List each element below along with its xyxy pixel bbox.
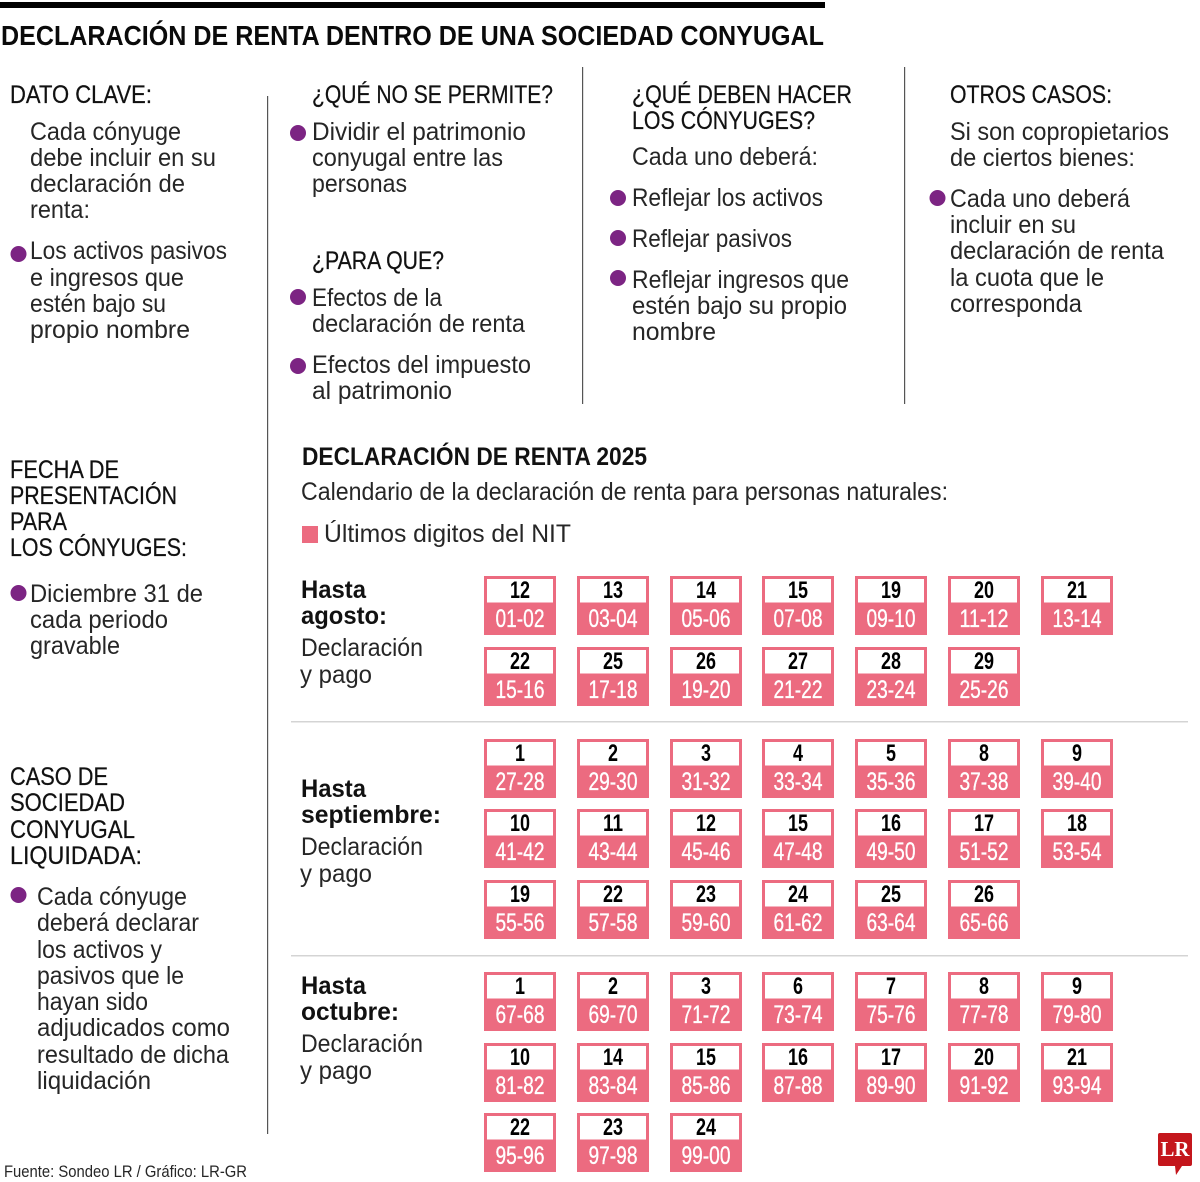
bullet: cada cónyuge deberá declarar: hayan sido xyxy=(37,988,148,1016)
bullet: reflejar ingresos: nombre xyxy=(632,318,716,346)
cell 13 / 03-04: 03-04 xyxy=(588,605,638,633)
cell 21 / 13-14: 21 xyxy=(1067,577,1087,604)
cell 12 / 01-02: 12 xyxy=(510,577,530,604)
title: DECLARACIÓN DE RENTA DENTRO DE UNA SOCIEDAD CONYUGAL xyxy=(1,20,824,51)
cell 9 / 79-80: 79-80 xyxy=(1052,1001,1102,1029)
bullet: efectos declaración: Efectos de la xyxy=(312,284,442,312)
heading: qué deben hacer xyxy=(632,80,852,135)
icon: LR logo: LR xyxy=(1160,1137,1190,1161)
label: hasta septiembre: septiembre: xyxy=(301,801,441,829)
cell 14 / 05-06: 05-06 xyxy=(682,605,730,633)
cell 19 / 09-10 xyxy=(855,576,927,635)
bullet: activos pasivos: Los activos pasivos xyxy=(30,237,227,265)
cell 8 / 77-78: 8 xyxy=(979,973,989,1000)
cell 26 / 19-20 xyxy=(670,647,742,706)
cell 16 / 49-50: 49-50 xyxy=(866,838,916,866)
bullet: dividir patrimonio xyxy=(290,118,526,198)
cell 20 / 11-12: 20 xyxy=(974,577,994,604)
bullet: cuota: corresponda xyxy=(950,290,1082,318)
cell 26 / 65-66: 65-66 xyxy=(960,909,1008,937)
cell 20 / 91-92: 20 xyxy=(974,1044,994,1071)
cell 21 / 93-94: 93-94 xyxy=(1052,1072,1102,1100)
bullet: reflejar ingresos xyxy=(610,266,849,346)
cell 2 / 69-70: 69-70 xyxy=(588,1001,638,1029)
bullet: cada cónyuge deberá declarar: deberá declarar xyxy=(37,909,199,937)
cell 15 / 07-08 xyxy=(762,576,834,635)
panel: fecha de presentación xyxy=(10,456,203,660)
cell 19 / 55-56: 55-56 xyxy=(496,909,544,937)
cell 9 / 79-80: 9 xyxy=(1072,973,1082,1000)
heading: qué deben hacer: ¿QUÉ DEBEN HACER xyxy=(632,80,852,109)
cell 26 / 19-20: 19-20 xyxy=(682,676,730,704)
text: cada uno deberá: Cada uno deberá: xyxy=(632,143,818,171)
cell 8 / 77-78: 77-78 xyxy=(960,1001,1008,1029)
cell 12 / 01-02 xyxy=(484,576,556,635)
heading: fecha de presentación: LOS CÓNYUGES: xyxy=(10,533,187,562)
cell 17 / 89-90: 17 xyxy=(881,1044,901,1071)
cell 12 / 45-46 xyxy=(670,809,742,868)
cell 16 / 87-88 xyxy=(762,1043,834,1102)
bullet: dividir patrimonio: conyugal entre las xyxy=(312,144,503,172)
cell 9 / 79-80 xyxy=(1041,972,1113,1031)
bullet: cada cónyuge deberá declarar: adjudicados como xyxy=(37,1014,230,1042)
cell 27 / 21-22 xyxy=(762,647,834,706)
heading: fecha de presentación: FECHA DE xyxy=(10,456,119,484)
cell 5 / 35-36: 5 xyxy=(886,740,896,767)
cell 23 / 97-98 xyxy=(577,1113,649,1172)
cell 16 / 49-50 xyxy=(855,809,927,868)
bullet: cada cónyuge deberá declarar: pasivos que le xyxy=(37,962,184,990)
cell 7 / 75-76: 75-76 xyxy=(866,1001,916,1029)
cell 25 / 17-18 xyxy=(577,647,649,706)
cell 1 / 67-68: 67-68 xyxy=(496,1001,544,1029)
cell 3 / 31-32: 3 xyxy=(701,740,711,767)
cell 17 / 51-52: 51-52 xyxy=(960,838,1008,866)
cell 8 / 77-78 xyxy=(948,972,1020,1031)
label: hasta agosto: agosto: xyxy=(301,602,387,630)
cell 11 / 43-44 xyxy=(577,809,649,868)
cell 20 / 91-92: 91-92 xyxy=(960,1072,1008,1100)
bullet: cuota: la cuota que le xyxy=(950,264,1104,292)
cell 3 / 31-32: 31-32 xyxy=(682,768,730,796)
cell 28 / 23-24: 28 xyxy=(881,648,901,675)
heading: fecha de presentación: PRESENTACIÓN xyxy=(10,481,177,510)
cell 25 / 63-64: 63-64 xyxy=(866,909,916,937)
source: Fuente: Sondeo LR / Gráfico: LR-GR xyxy=(4,1162,247,1181)
cell 14 / 05-06: 14 xyxy=(696,577,716,604)
cell 16 / 87-88: 87-88 xyxy=(774,1072,822,1100)
cell 21 / 93-94 xyxy=(1041,1043,1113,1102)
label: hasta septiembre xyxy=(300,775,441,888)
bullet: cuota: declaración de renta xyxy=(950,237,1164,265)
cell 9 / 39-40: 39-40 xyxy=(1052,768,1102,796)
bullet: cuota xyxy=(930,185,1164,318)
cell 14 / 83-84 xyxy=(577,1043,649,1102)
bullet: cuota: Cada uno deberá xyxy=(950,185,1130,213)
cell 23 / 59-60: 59-60 xyxy=(682,909,730,937)
panel: otros casos xyxy=(930,81,1169,318)
cell 20 / 11-12: 11-12 xyxy=(960,605,1008,633)
cell 24 / 99-00 xyxy=(670,1113,742,1172)
cell 24 / 61-62 xyxy=(762,880,834,939)
cell 27 / 21-22: 21-22 xyxy=(774,676,822,704)
bullet: activos pasivos: estén bajo su xyxy=(30,290,166,318)
label: hasta septiembre: y pago xyxy=(300,860,372,888)
cell 10 / 81-82 xyxy=(484,1043,556,1102)
text: intro dato clave: debe incluir en su xyxy=(30,144,216,172)
bullet: dividir patrimonio: personas xyxy=(312,170,407,198)
cell 18 / 53-54: 18 xyxy=(1067,810,1087,837)
panel: sociedad conyugal liquidada xyxy=(10,763,230,1095)
cell 1 / 27-28 xyxy=(484,739,556,798)
cell 25 / 17-18: 17-18 xyxy=(588,676,638,704)
cell 2 / 69-70 xyxy=(577,972,649,1031)
bullet: diciembre 31: gravable xyxy=(30,632,120,660)
heading: caso de sociedad conyugal liquidada: LIQUIDADA: xyxy=(10,842,142,870)
cell 19 / 55-56: 19 xyxy=(510,881,530,908)
label: hasta agosto: Declaración xyxy=(301,634,423,662)
cell 17 / 89-90: 89-90 xyxy=(866,1072,916,1100)
cell 28 / 23-24 xyxy=(855,647,927,706)
cell 7 / 75-76 xyxy=(855,972,927,1031)
bullet: reflejar activos: Reflejar los activos xyxy=(632,184,823,212)
text: intro dato clave: Cada cónyuge xyxy=(30,118,181,146)
calendar heading: DECLARACIÓN DE RENTA 2025 xyxy=(302,441,647,471)
cell 1 / 67-68 xyxy=(484,972,556,1031)
date grid: agosto xyxy=(484,576,1113,706)
cell 22 / 15-16 xyxy=(484,647,556,706)
cell 7 / 75-76: 7 xyxy=(886,973,896,1000)
cell 29 / 25-26: 25-26 xyxy=(960,676,1008,704)
cell 24 / 61-62: 24 xyxy=(788,881,808,908)
bullet: cada cónyuge deberá declarar: liquidación xyxy=(37,1067,151,1095)
bullet: diciembre 31: cada periodo xyxy=(30,606,168,634)
cell 23 / 97-98: 23 xyxy=(603,1114,623,1141)
cell 25 / 17-18: 25 xyxy=(603,648,623,675)
text: copropietarios xyxy=(950,118,1169,172)
cell 16 / 49-50: 16 xyxy=(881,810,901,837)
cell 14 / 83-84: 83-84 xyxy=(588,1072,638,1100)
cell 22 / 95-96 xyxy=(484,1113,556,1172)
heading: caso de sociedad conyugal liquidada: CASO DE xyxy=(10,763,108,791)
cell 27 / 21-22: 27 xyxy=(788,648,808,675)
cell 15 / 07-08: 07-08 xyxy=(774,605,822,633)
cell 3 / 71-72 xyxy=(670,972,742,1031)
cell 11 / 43-44: 11 xyxy=(603,810,623,837)
cell 1 / 27-28: 1 xyxy=(515,740,525,767)
bullet: diciembre 31 xyxy=(10,580,203,660)
heading: fecha de presentación xyxy=(10,456,187,562)
cell 15 / 47-48 xyxy=(762,809,834,868)
cell 25 / 63-64: 25 xyxy=(881,881,901,908)
cell 18 / 53-54 xyxy=(1041,809,1113,868)
bullet: dividir patrimonio: Dividir el patrimonio xyxy=(312,118,526,146)
text: intro dato clave: declaración de xyxy=(30,170,185,198)
cell 20 / 11-12 xyxy=(948,576,1020,635)
label: hasta agosto xyxy=(300,576,423,689)
cell 26 / 65-66 xyxy=(948,880,1020,939)
cell 2 / 29-30: 2 xyxy=(608,740,618,767)
cell 24 / 99-00: 99-00 xyxy=(682,1142,730,1170)
cell 25 / 63-64 xyxy=(855,880,927,939)
cell 6 / 73-74: 6 xyxy=(793,973,803,1000)
heading: caso de sociedad conyugal liquidada xyxy=(10,763,142,870)
cell 29 / 25-26: 29 xyxy=(974,648,994,675)
bullet: efectos declaración xyxy=(290,284,525,338)
cell 10 / 41-42: 41-42 xyxy=(496,838,544,866)
text: copropietarios: de ciertos bienes: xyxy=(950,144,1135,172)
cell 5 / 35-36 xyxy=(855,739,927,798)
cell 13 / 03-04 xyxy=(577,576,649,635)
date grid: septiembre xyxy=(484,739,1113,939)
cell 22 / 57-58 xyxy=(577,880,649,939)
cell 10 / 81-82: 10 xyxy=(510,1044,530,1071)
cell 16 / 87-88: 16 xyxy=(788,1044,808,1071)
cell 13 / 03-04: 13 xyxy=(603,577,623,604)
cell 4 / 33-34: 4 xyxy=(793,740,803,767)
bullet: activos pasivos: propio nombre xyxy=(30,316,190,344)
cell 21 / 13-14 xyxy=(1041,576,1113,635)
cell 3 / 31-32 xyxy=(670,739,742,798)
heading: otros casos: OTROS CASOS: xyxy=(950,81,1112,109)
cell 2 / 69-70: 2 xyxy=(608,973,618,1000)
cell 12 / 45-46: 12 xyxy=(696,810,716,837)
cell 22 / 57-58: 57-58 xyxy=(588,909,638,937)
bullet: cada cónyuge deberá declarar xyxy=(10,883,230,1095)
legend: Últimos digitos del NIT xyxy=(324,519,571,548)
cell 29 / 25-26 xyxy=(948,647,1020,706)
cell 15 / 85-86: 15 xyxy=(696,1044,716,1071)
cell 17 / 51-52: 17 xyxy=(974,810,994,837)
text: intro dato clave xyxy=(30,118,216,224)
cell 22 / 15-16: 22 xyxy=(510,648,530,675)
bullet: reflejar ingresos: Reflejar ingresos que xyxy=(632,266,849,294)
label: hasta septiembre: Declaración xyxy=(301,833,423,861)
cell 19 / 09-10: 19 xyxy=(881,577,901,604)
label: hasta agosto: y pago xyxy=(300,661,372,689)
cell 10 / 81-82: 81-82 xyxy=(496,1072,544,1100)
cell 22 / 95-96: 22 xyxy=(510,1114,530,1141)
bullet: efectos impuesto: Efectos del impuesto xyxy=(312,351,531,379)
top bar xyxy=(0,2,825,8)
cell 15 / 07-08: 15 xyxy=(788,577,808,604)
cell 12 / 01-02: 01-02 xyxy=(496,605,544,633)
cell 10 / 41-42: 10 xyxy=(510,810,530,837)
cell 5 / 35-36: 35-36 xyxy=(866,768,916,796)
bullet: efectos declaración: declaración de renta xyxy=(312,310,525,338)
cell 3 / 71-72: 3 xyxy=(701,973,711,1000)
cell 2 / 29-30: 29-30 xyxy=(588,768,638,796)
cell 9 / 39-40 xyxy=(1041,739,1113,798)
bullet: reflejar pasivos: Reflejar pasivos xyxy=(632,225,792,253)
heading: caso de sociedad conyugal liquidada: SOCIEDAD xyxy=(10,789,125,817)
cell 19 / 55-56 xyxy=(484,880,556,939)
cell 26 / 65-66: 26 xyxy=(974,881,994,908)
cell 14 / 83-84: 14 xyxy=(603,1044,623,1071)
bullet: cada cónyuge deberá declarar: resultado de dicha xyxy=(37,1041,229,1069)
cell 14 / 05-06 xyxy=(670,576,742,635)
label: hasta octubre: y pago xyxy=(300,1057,372,1085)
bullet: activos pasivos: e ingresos que xyxy=(30,264,184,292)
panel: dato clave xyxy=(10,81,227,344)
cell 21 / 13-14: 13-14 xyxy=(1052,605,1102,633)
cell 22 / 15-16: 15-16 xyxy=(496,676,544,704)
cell 28 / 23-24: 23-24 xyxy=(866,676,916,704)
heading: qué deben hacer: LOS CÓNYUGES? xyxy=(632,106,815,135)
cell 11 / 43-44: 43-44 xyxy=(588,838,638,866)
cell 18 / 53-54: 53-54 xyxy=(1052,838,1102,866)
cell 15 / 47-48: 15 xyxy=(788,810,808,837)
calendar subtitle: Calendario de la declaración de renta para personas naturales: xyxy=(301,478,948,506)
cell 19 / 09-10: 09-10 xyxy=(866,605,916,633)
cell 20 / 91-92 xyxy=(948,1043,1020,1102)
cell 8 / 37-38: 8 xyxy=(979,740,989,767)
cell 15 / 85-86: 85-86 xyxy=(682,1072,730,1100)
cell 6 / 73-74 xyxy=(762,972,834,1031)
cell 8 / 37-38 xyxy=(948,739,1020,798)
panel: qué no se permite xyxy=(290,80,553,405)
bullet: activos pasivos xyxy=(10,237,227,344)
cell 12 / 45-46: 45-46 xyxy=(682,838,730,866)
cell 23 / 97-98: 97-98 xyxy=(588,1142,638,1170)
cell 15 / 85-86 xyxy=(670,1043,742,1102)
cell 21 / 93-94: 21 xyxy=(1067,1044,1087,1071)
cell 24 / 61-62: 61-62 xyxy=(774,909,822,937)
cell 24 / 99-00: 24 xyxy=(696,1114,716,1141)
cell 6 / 73-74: 73-74 xyxy=(774,1001,823,1029)
bullet: cada cónyuge deberá declarar: los activos y xyxy=(37,936,162,964)
cell 22 / 57-58: 22 xyxy=(603,881,623,908)
bullet: cada cónyuge deberá declarar: Cada cónyuge xyxy=(37,883,187,911)
cell 2 / 29-30 xyxy=(577,739,649,798)
heading: qué no se permite: ¿QUÉ NO SE PERMITE? xyxy=(312,80,553,109)
bullet: efectos impuesto xyxy=(290,351,531,405)
heading: dato clave: DATO CLAVE: xyxy=(10,81,152,109)
cell 3 / 71-72: 71-72 xyxy=(682,1001,730,1029)
icon: LR logo xyxy=(1158,1133,1192,1175)
label: hasta septiembre: Hasta xyxy=(301,775,367,803)
cell 9 / 39-40: 9 xyxy=(1072,740,1082,767)
cell 4 / 33-34 xyxy=(762,739,834,798)
cell 1 / 67-68: 1 xyxy=(515,973,525,1000)
cell 15 / 47-48: 47-48 xyxy=(774,838,822,866)
bullet: reflejar ingresos: estén bajo su propio xyxy=(632,292,847,320)
text: copropietarios: Si son copropietarios xyxy=(950,118,1169,146)
cell 1 / 27-28: 27-28 xyxy=(496,768,544,796)
cell 8 / 37-38: 37-38 xyxy=(960,768,1008,796)
date grid: octubre xyxy=(484,972,1113,1172)
cell 10 / 41-42 xyxy=(484,809,556,868)
heading: fecha de presentación: PARA xyxy=(10,508,67,536)
label: hasta octubre xyxy=(300,972,423,1085)
bullet: cuota: incluir en su xyxy=(950,211,1076,239)
text: intro dato clave: renta: xyxy=(30,196,90,224)
cell 26 / 19-20: 26 xyxy=(696,648,716,675)
cell 23 / 59-60 xyxy=(670,880,742,939)
panel: qué deben hacer xyxy=(610,80,852,346)
label: hasta octubre: octubre: xyxy=(301,998,399,1026)
bullet: diciembre 31: Diciembre 31 de xyxy=(30,580,203,608)
cell 17 / 51-52 xyxy=(948,809,1020,868)
label: hasta octubre: Declaración xyxy=(301,1030,423,1058)
cell 4 / 33-34: 33-34 xyxy=(774,768,823,796)
cell 17 / 89-90 xyxy=(855,1043,927,1102)
label: hasta agosto: Hasta xyxy=(301,576,367,604)
heading: para que: ¿PARA QUE? xyxy=(312,247,444,275)
cell 22 / 95-96: 95-96 xyxy=(496,1142,544,1170)
cell 23 / 59-60: 23 xyxy=(696,881,716,908)
label: hasta octubre: Hasta xyxy=(301,972,367,1000)
bullet: efectos impuesto: al patrimonio xyxy=(312,377,452,405)
heading: caso de sociedad conyugal liquidada: CONYUGAL xyxy=(10,816,135,844)
